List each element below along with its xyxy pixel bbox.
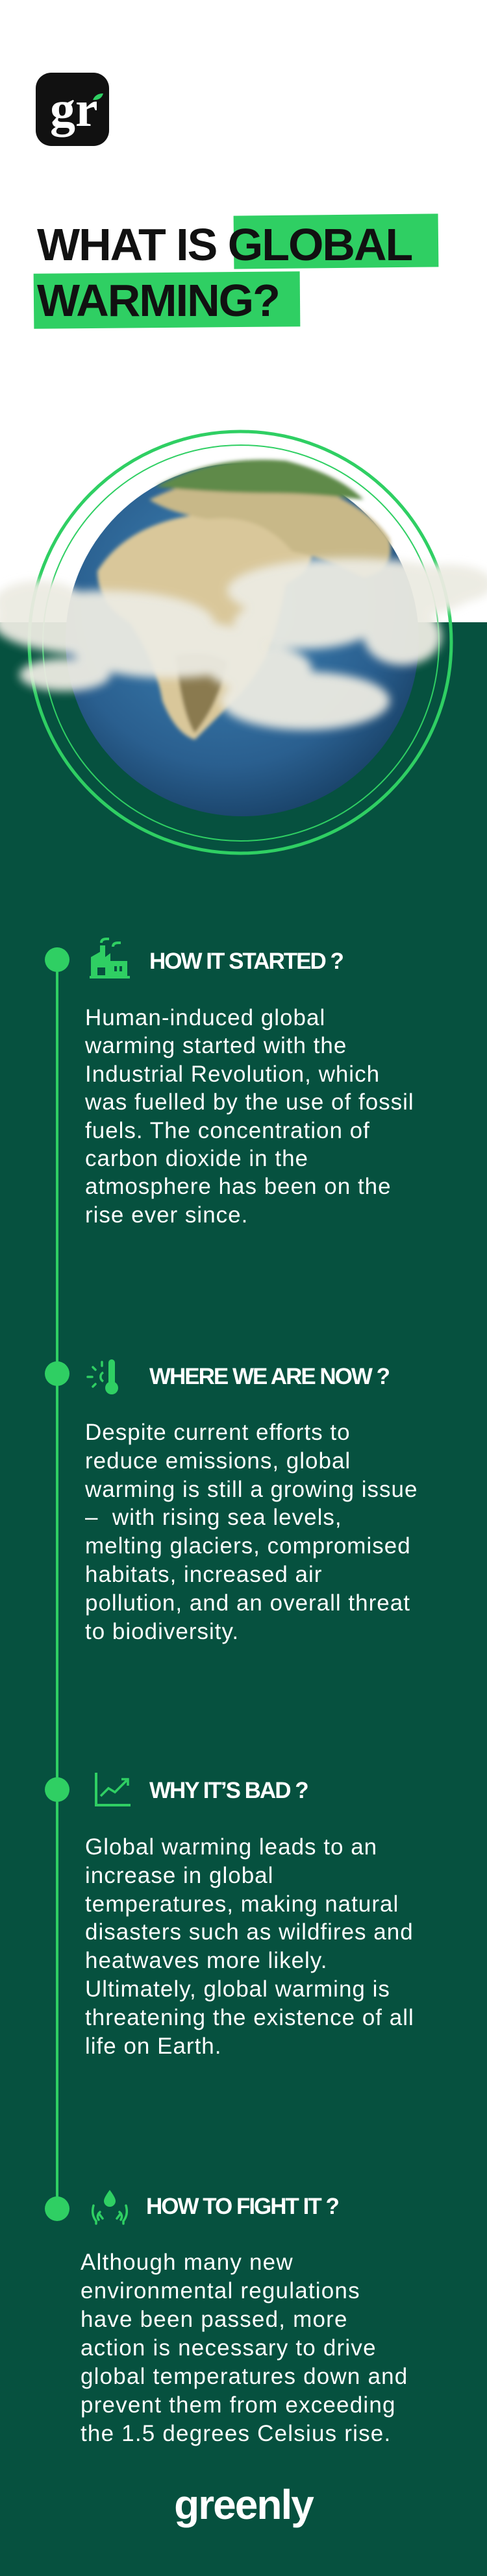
body text: Ultimately, global warming is: [85, 1976, 390, 2002]
body text: [85, 1834, 414, 2059]
timeline dot 4: [45, 2196, 69, 2221]
heading: HOW IT STARTED ?: [149, 949, 343, 974]
body text: life on Earth.: [85, 2034, 222, 2059]
body text: Despite current efforts to: [85, 1420, 351, 1445]
greenly logo: greenly: [174, 2481, 313, 2528]
heading: WHY IT’S BAD ?: [149, 1778, 308, 1803]
body text: fuels. The concentration of: [85, 1118, 370, 1143]
icon: hands with drop: [91, 2190, 129, 2225]
section: where we are now: [45, 1359, 418, 1644]
title: [34, 213, 439, 329]
body text: warming is still a growing issue: [85, 1477, 418, 1502]
body text: – with rising sea levels,: [85, 1505, 342, 1530]
section: why it's bad: [45, 1773, 414, 2059]
body text: threatening the existence of all: [85, 2005, 414, 2030]
body text: action is necessary to drive: [81, 2335, 377, 2361]
timeline dot 1: [45, 947, 69, 972]
body text: environmental regulations: [81, 2278, 360, 2303]
title: WHAT IS GLOBAL: [37, 219, 412, 270]
body text: heatwaves more likely.: [85, 1948, 327, 1973]
heading: HOW TO FIGHT IT ?: [146, 2194, 338, 2219]
icon: thermometer: [86, 1359, 118, 1394]
body text: [85, 1420, 418, 1644]
timeline dot 3: [45, 1777, 69, 1802]
body text: the 1.5 degrees Celsius rise.: [81, 2421, 391, 2446]
body text: atmosphere has been on the: [85, 1174, 392, 1199]
title: WARMING?: [37, 275, 279, 326]
body text: habitats, increased air: [85, 1562, 322, 1587]
green background: [0, 622, 487, 2576]
body text: was fuelled by the use of fossil: [85, 1089, 414, 1115]
body text: disasters such as wildfires and: [85, 1919, 414, 1945]
body text: carbon dioxide in the: [85, 1146, 308, 1171]
body text: temperatures, making natural: [85, 1891, 399, 1917]
body text: global temperatures down and: [81, 2364, 408, 2389]
body text: have been passed, more: [81, 2307, 348, 2332]
heading: WHERE WE ARE NOW ?: [149, 1364, 389, 1389]
body text: [81, 2250, 408, 2446]
body text: prevent them from exceeding: [81, 2392, 396, 2418]
timeline line: [56, 960, 58, 2209]
body text: Although many new: [81, 2250, 293, 2275]
body text: increase in global: [85, 1863, 273, 1888]
body text: warming started with the: [85, 1033, 347, 1058]
body text: Human-induced global: [85, 1005, 325, 1030]
section: how to fight it: [45, 2190, 408, 2446]
body text: Industrial Revolution, which: [85, 1062, 380, 1087]
logo badge: gr: [50, 80, 98, 137]
body text: Global warming leads to an: [85, 1834, 377, 1860]
body text: [85, 1005, 414, 1228]
section: how it started: [45, 938, 414, 1228]
body text: reduce emissions, global: [85, 1448, 351, 1474]
body text: rise ever since.: [85, 1202, 248, 1228]
timeline dot 2: [45, 1361, 69, 1386]
globe illustration: [0, 430, 487, 855]
icon: factory: [90, 938, 130, 978]
body text: pollution, and an overall threat: [85, 1590, 410, 1616]
body text: melting glaciers, compromised: [85, 1533, 411, 1559]
icon: rising chart: [95, 1773, 131, 1806]
body text: to biodiversity.: [85, 1619, 239, 1644]
logo badge: [36, 73, 109, 146]
